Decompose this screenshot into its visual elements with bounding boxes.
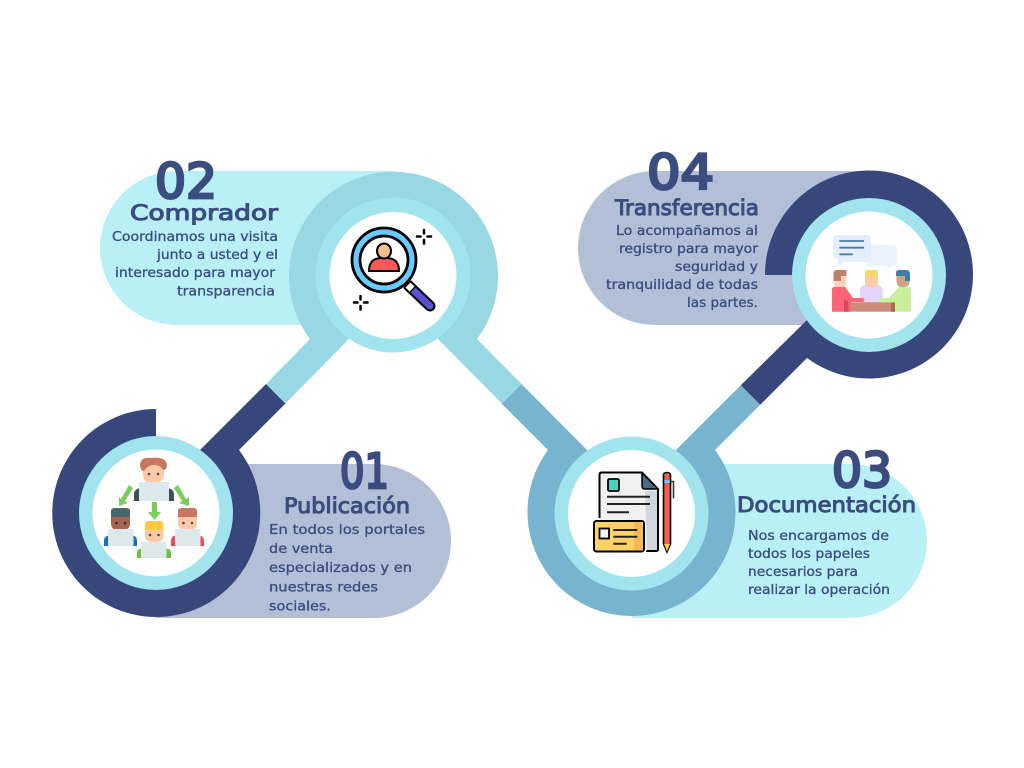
heading: Documentación: Documentación bbox=[737, 493, 916, 518]
text block 04: tranquilidad de todas bbox=[606, 277, 758, 293]
white disc 04 bbox=[806, 212, 932, 338]
white disc 01 bbox=[92, 450, 220, 576]
text block 01: especializados y en bbox=[269, 560, 412, 576]
white disc 02 bbox=[330, 212, 456, 339]
text block 03: realizar la operación bbox=[748, 582, 890, 598]
text block 04: registro para mayor bbox=[619, 241, 758, 257]
text block 04: Lo acompañamos al bbox=[616, 223, 758, 239]
ring and connector 04 bbox=[741, 171, 973, 405]
text block 03 bbox=[748, 528, 890, 598]
ring and connectors 03 bbox=[502, 384, 760, 616]
text block 04: las partes. bbox=[687, 295, 758, 311]
text block 02: transparencia bbox=[177, 284, 275, 300]
panel: 01 pill background bbox=[156, 464, 451, 618]
icon: magnifying glass with person bbox=[352, 228, 431, 310]
text block 02: Coordinamos una visita bbox=[112, 229, 278, 245]
text block 01: En todos los portales bbox=[269, 522, 425, 538]
heading: Comprador: Comprador bbox=[130, 201, 278, 226]
text block 01 bbox=[269, 522, 425, 614]
inner ring 02 bbox=[316, 198, 470, 352]
text block 04: seguridad y bbox=[675, 259, 758, 275]
step 03: Documentación bbox=[502, 384, 927, 618]
number 02: 02 bbox=[155, 154, 217, 210]
number 04: 04 bbox=[647, 145, 714, 201]
text block 02 bbox=[112, 229, 278, 300]
white disc 03 bbox=[568, 450, 695, 577]
text block 02: junto a usted y el bbox=[156, 247, 278, 263]
text block 01: de venta bbox=[269, 541, 333, 557]
text block 03: Nos encargamos de bbox=[748, 528, 889, 544]
panel: 02 pill background bbox=[100, 171, 393, 325]
panel: 04 pill background bbox=[578, 171, 869, 325]
number 03: 03 bbox=[832, 443, 892, 499]
icon: team of people with laptops bbox=[104, 458, 204, 558]
step 01: Publicación bbox=[52, 384, 451, 618]
ring and connector 01 bbox=[52, 384, 286, 617]
heading: Transferencia: Transferencia bbox=[614, 196, 759, 221]
inner ring 04 bbox=[792, 198, 946, 352]
icon: people talking at a table bbox=[832, 235, 911, 312]
text block 03: necesarios para bbox=[748, 564, 858, 580]
text block 02: interesado para mayor bbox=[115, 265, 275, 281]
number 01: 01 bbox=[340, 444, 389, 500]
heading: Publicación: Publicación bbox=[284, 494, 410, 519]
text block 01: nuestras redes bbox=[269, 580, 378, 596]
text block 03: todos los papeles bbox=[748, 546, 870, 562]
step 04: Transferencia bbox=[578, 145, 973, 405]
panel: 03 pill background bbox=[632, 464, 927, 618]
icon: documents, card and pen bbox=[594, 472, 674, 552]
inner ring 03 bbox=[554, 436, 708, 590]
ring and connectors 02 bbox=[266, 172, 522, 404]
text block 01: sociales. bbox=[269, 598, 331, 614]
inner ring 01 bbox=[79, 436, 233, 590]
step 02: Comprador bbox=[100, 154, 522, 404]
text block 04 bbox=[606, 223, 758, 311]
